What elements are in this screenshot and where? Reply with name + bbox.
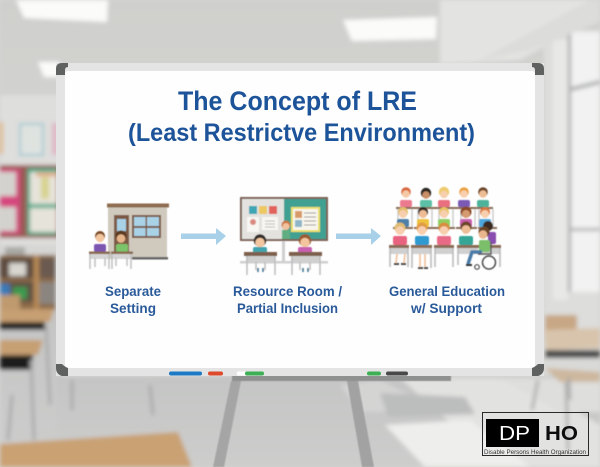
ceiling lights xyxy=(16,0,437,77)
easel stand xyxy=(213,375,451,467)
logo caption: Disable Persons Health Organization xyxy=(484,450,586,456)
dark marker xyxy=(386,372,408,376)
title: (Least Restrictve Environment) xyxy=(128,119,475,147)
label: resource room / partial inclusion xyxy=(233,283,342,316)
blue marker xyxy=(169,372,202,376)
arrow: resource room to general education xyxy=(336,228,381,245)
sunlight patches xyxy=(340,378,600,467)
second green marker xyxy=(367,372,381,376)
right leg xyxy=(347,381,374,467)
board writing surface xyxy=(65,71,535,368)
red marker xyxy=(208,372,223,376)
label: separate setting xyxy=(105,283,161,316)
label: general education with support xyxy=(389,283,505,316)
middle row xyxy=(393,206,497,228)
whiteboard xyxy=(56,63,544,376)
white marker xyxy=(237,372,246,376)
left desks xyxy=(0,295,192,467)
logo HO letters: HO xyxy=(545,423,578,445)
corner caps xyxy=(56,63,544,376)
back row xyxy=(396,187,493,208)
icon: classroom board with teacher and two students xyxy=(240,197,328,275)
label: separate setting: Separate xyxy=(105,283,161,299)
bulletin boards xyxy=(0,165,60,238)
label: general education with support: General Education xyxy=(389,283,505,299)
wheelchair student xyxy=(466,226,496,269)
right desks xyxy=(532,315,600,450)
stage: general education xyxy=(389,187,505,316)
wall posters xyxy=(0,122,58,155)
front row xyxy=(389,221,501,269)
stage: resource room xyxy=(233,197,342,316)
label: general education with support: w/ Support xyxy=(410,300,482,316)
logo black block xyxy=(486,419,539,447)
arrow: separate to resource room xyxy=(181,228,226,245)
logo frame xyxy=(482,412,588,456)
label: separate setting: Setting xyxy=(110,300,156,316)
title xyxy=(128,86,475,147)
title: The Concept of LRE xyxy=(178,86,417,116)
board frame xyxy=(56,63,544,376)
floor xyxy=(56,376,600,467)
bookshelf xyxy=(0,247,56,310)
label: resource room / partial inclusion: Partial Inclusion xyxy=(237,300,338,316)
green marker xyxy=(245,372,264,376)
easel tray xyxy=(232,375,451,381)
logo DP letters: DP xyxy=(499,423,530,445)
logo: DPHO xyxy=(482,412,588,456)
icon: small building with two students xyxy=(89,204,169,269)
left leg xyxy=(213,381,241,467)
right window xyxy=(480,0,600,330)
icon: full classroom of students with wheelchair user xyxy=(389,187,501,269)
marker tray xyxy=(169,372,408,376)
label: resource room / partial inclusion: Resource Room / xyxy=(233,283,342,299)
stage: separate setting xyxy=(89,204,169,316)
